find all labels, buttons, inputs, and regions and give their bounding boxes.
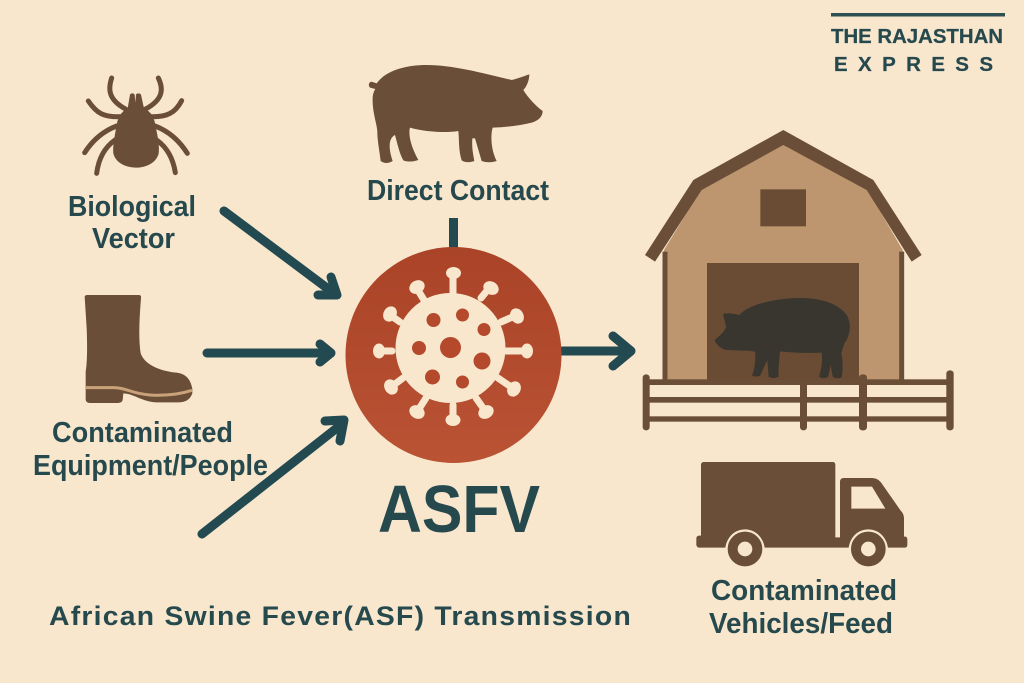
icon: pig (direct contact) [369, 65, 543, 163]
label: Biological Vector: Biological [68, 191, 196, 223]
label: Biological Vector [68, 191, 196, 255]
icon: truck [696, 462, 907, 561]
label: Contaminated Vehicles/Feed: Contaminated [711, 575, 897, 607]
logo: The Rajasthan Express: EXPRESS [834, 53, 993, 76]
barn walls [664, 143, 903, 381]
arrow: virus to barn [562, 336, 631, 366]
label: Contaminated Vehicles/Feed [709, 575, 897, 640]
arrow: biological vector to virus [224, 211, 337, 295]
label: Contaminated Vehicles/Feed: Vehicles/Feed [709, 608, 893, 640]
label: Direct Contact: Direct Contact [367, 175, 549, 207]
label: Contaminated Equipment/People: Contaminated [52, 417, 233, 449]
barn door [707, 263, 859, 380]
fence [643, 370, 954, 430]
label: Biological Vector: Vector [92, 223, 175, 255]
label: Contaminated Equipment/People: Equipment/People [33, 450, 268, 482]
icon: virus circle [346, 247, 562, 463]
virus particle [373, 267, 533, 426]
barn window [760, 189, 806, 226]
arrow: direct contact connector [449, 218, 458, 248]
virus holes [412, 308, 490, 388]
title: African Swine Fever(ASF) Transmission [49, 601, 632, 631]
icon: boot [85, 295, 192, 403]
label: ASFV: ASFV [378, 472, 540, 547]
label: Contaminated Equipment/People [33, 417, 268, 482]
logo: The Rajasthan Express: THE RAJASTHAN [831, 25, 1003, 48]
arrow: lower left to virus [202, 420, 344, 534]
pig silhouette [715, 298, 850, 378]
barn roof [645, 130, 922, 262]
logo: The Rajasthan Express [831, 13, 1005, 76]
icon: tick [85, 78, 187, 173]
arrow: equipment to virus [207, 344, 331, 362]
icon: barn with pig [643, 130, 954, 430]
